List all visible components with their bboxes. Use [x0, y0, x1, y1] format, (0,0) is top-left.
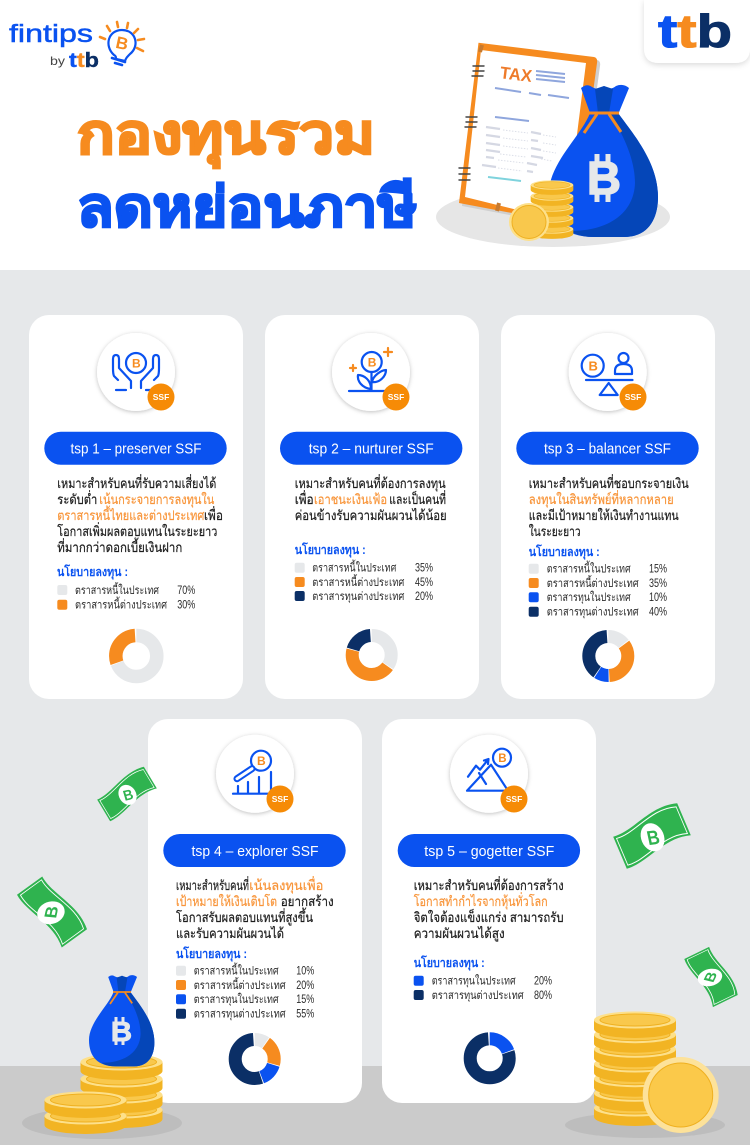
legend: 20%: [296, 980, 314, 992]
tax notebook: TAX: [499, 63, 534, 86]
icon: plant with coin: SSF: [388, 392, 404, 402]
legend: นโยบายลงทุน :: [414, 955, 485, 971]
logo tab: ttb: [644, 0, 750, 63]
icon: magnifier and bars: SSF: [272, 794, 288, 804]
description: เหมาะสำหรับคนที่รับความเสี่ยงได้: [57, 474, 216, 491]
legend: ตราสารทุนในประเทศ: [194, 993, 279, 1006]
small money bag: B: [111, 1016, 132, 1047]
heading pill: [516, 432, 699, 465]
heading pill: tsp 2 – nurturer SSF: [309, 442, 434, 458]
legend: 35%: [649, 578, 667, 590]
heading pill: [280, 432, 462, 465]
legend: ตราสารหนี้ต่างประเทศ: [75, 596, 168, 612]
heading pill: [44, 432, 227, 465]
legend: ตราสารหนี้ในประเทศ: [75, 582, 160, 597]
heading pill: tsp 4 – explorer SSF: [192, 844, 319, 860]
panel: tsp 4 explorer: [148, 719, 362, 1103]
illustration: tax notebook, money bag and coins: [436, 43, 670, 247]
heading pill: tsp 5 – gogetter SSF: [424, 844, 554, 860]
description: ค่อนข้างรับความผันผวนได้น้อย: [295, 508, 447, 523]
description: [176, 876, 334, 941]
panel: tsp 5 gogetter: [382, 719, 596, 1103]
description: ในระยะยาว: [529, 523, 581, 539]
panel: tsp 2 nurturer: [265, 315, 479, 699]
banknote right: B: [701, 971, 721, 984]
heading pill: tsp 3 – balancer SSF: [544, 442, 671, 458]
legend: ตราสารทุนในประเทศ: [547, 591, 631, 604]
background: grey body: [0, 270, 750, 1067]
description: [529, 474, 689, 539]
banknote right top: [610, 801, 693, 869]
description: เน้นกระจายการลงทุนใน: [99, 491, 214, 508]
money bag: [549, 85, 658, 237]
legend: ตราสารหนี้ต่างประเทศ: [312, 574, 405, 589]
description: ตราสารหนี้ไทยและต่างประเทศ: [57, 505, 205, 523]
illustration: left coins and money bag: [22, 975, 182, 1139]
legend: นโยบายลงทุน :: [529, 544, 600, 560]
banknote left: B: [40, 905, 63, 919]
legend: ตราสารหนี้ต่างประเทศ: [194, 977, 286, 992]
coin stack: [509, 180, 573, 241]
description: ระดับต่ำ: [57, 490, 97, 507]
icon: mountain with arrow: B: [498, 753, 507, 765]
legend: [414, 955, 552, 1002]
legend: [176, 946, 314, 1020]
legend: ตราสารหนี้ในประเทศ: [547, 560, 631, 576]
legend: 40%: [649, 606, 667, 618]
logo: fintips by ttb: ttb: [69, 50, 99, 72]
legend: ตราสารทุนในประเทศ: [432, 974, 516, 988]
legend: ตราสารทุนต่างประเทศ: [312, 591, 405, 603]
legend: นโยบายลงทุน :: [57, 564, 128, 580]
logo tab: ttb: ttb: [658, 5, 732, 57]
description: เพื่อ: [295, 490, 314, 507]
description: เหมาะสำหรับคนที่ชอบกระจายเงิน: [529, 474, 689, 491]
icon: plant with coin: [332, 333, 410, 411]
description: และรับความผันผวนได้: [176, 926, 284, 941]
description: และเป็นคนที่: [389, 490, 446, 507]
icon: hands holding coin: SSF: [153, 392, 169, 402]
description: โอกาสรับผลตอบแทนที่สูงขึ้น: [176, 907, 313, 926]
legend: ตราสารทุนต่างประเทศ: [432, 990, 524, 1002]
donut chart: [470, 1039, 509, 1078]
icon: hands holding coin: B: [132, 356, 141, 370]
logo: fintips by ttb: [9, 20, 144, 72]
legend: ตราสารหนี้ต่างประเทศ: [547, 575, 639, 590]
legend: 30%: [177, 600, 195, 612]
legend: ตราสารหนี้ในประเทศ: [194, 962, 279, 978]
heading pill: [398, 834, 580, 867]
description: เป้าหมายให้เงินเติบโต: [176, 893, 277, 909]
donut chart: [116, 636, 157, 676]
background: floor: [0, 1066, 750, 1145]
legend: 10%: [296, 966, 314, 978]
tax notebook: [459, 43, 600, 228]
legend: [529, 544, 667, 618]
description: และมีเป้าหมายให้เงินทำงานแทน: [529, 507, 679, 523]
legend: 15%: [649, 564, 667, 576]
description: เหมาะสำหรับคนที่ต้องการลงทุน: [295, 474, 446, 492]
banknote top left: B: [121, 786, 135, 804]
background: header white: [0, 0, 750, 270]
description: ที่มากกว่าดอกเบี้ยเงินฝาก: [57, 537, 182, 555]
icon: mountain with arrow: [450, 735, 528, 813]
legend: นโยบายลงทุน :: [176, 946, 247, 962]
description: เน้นลงทุนเพื่อ: [249, 876, 323, 894]
legend: 35%: [415, 562, 433, 574]
legend: 20%: [415, 591, 433, 603]
description: [414, 876, 564, 942]
donut chart: [352, 636, 391, 674]
icon: mountain with arrow: SSF: [506, 794, 522, 804]
legend: นโยบายลงทุน :: [295, 542, 366, 558]
description: เหมาะสำหรับคนที่ต้องการสร้าง: [414, 876, 564, 893]
legend: 20%: [534, 976, 552, 988]
banknote right top: B: [645, 826, 662, 849]
icon: magnifier and bars: [216, 735, 294, 813]
logo: fintips by ttb: by: [50, 54, 65, 68]
legend: [57, 564, 195, 612]
description: เอาชนะเงินเฟ้อ: [314, 492, 387, 507]
description: ลงทุนในสินทรัพย์ที่หลากหลาย: [529, 490, 674, 508]
icon: balance scale: B: [588, 358, 598, 374]
legend: 70%: [177, 585, 195, 597]
title: ลดหย่อนภาษี: [77, 176, 417, 238]
description: จิตใจต้องแข็งแกร่ง สามารถรับ: [414, 908, 564, 925]
legend: ตราสารทุนต่างประเทศ: [547, 606, 639, 618]
banknote right: [683, 944, 739, 1010]
illustration: right coins: [565, 1012, 725, 1138]
donut chart: [589, 636, 628, 676]
description: ความผันผวนได้สูง: [414, 926, 505, 942]
legend: ตราสารหนี้ในประเทศ: [312, 560, 397, 574]
heading pill: tsp 1 – preserver SSF: [70, 442, 202, 458]
small money bag: [89, 975, 154, 1066]
logo: fintips by ttb: B: [114, 33, 130, 54]
icon: balance scale: [569, 333, 647, 411]
panel: tsp 1 preserver: [29, 315, 243, 699]
donut chart: [235, 1040, 274, 1078]
description: โอกาสเพิ่มผลตอบแทนในระยะยาว: [57, 522, 217, 539]
panel: tsp 3 balancer: [501, 315, 715, 699]
legend: 10%: [649, 592, 667, 604]
legend: ตราสารทุนต่างประเทศ: [194, 1008, 286, 1020]
description: เหมาะสำหรับคนที่: [176, 876, 249, 893]
legend: 55%: [296, 1008, 314, 1020]
description: เพื่อ: [204, 506, 223, 523]
legend: 15%: [296, 994, 314, 1006]
description: [295, 474, 447, 523]
banknote left: [15, 872, 89, 952]
heading pill: [163, 834, 346, 867]
money bag: B: [587, 152, 621, 204]
banknote top left: [94, 765, 159, 821]
icon: magnifier and bars: B: [257, 754, 266, 768]
icon: hands holding coin: [97, 333, 175, 411]
description: อยากสร้าง: [281, 894, 334, 909]
legend: 80%: [534, 990, 552, 1002]
title: กองทุนรวม: [77, 103, 375, 169]
icon: balance scale: SSF: [625, 392, 641, 402]
logo: fintips by ttb: fintips: [9, 20, 93, 48]
title: [77, 103, 417, 238]
description: [57, 474, 223, 555]
description: โอกาสทำกำไรจากหุ้นทั่วโลก: [414, 892, 548, 910]
icon: plant with coin: B: [368, 356, 377, 370]
legend: 45%: [415, 577, 433, 589]
legend: [295, 542, 433, 603]
